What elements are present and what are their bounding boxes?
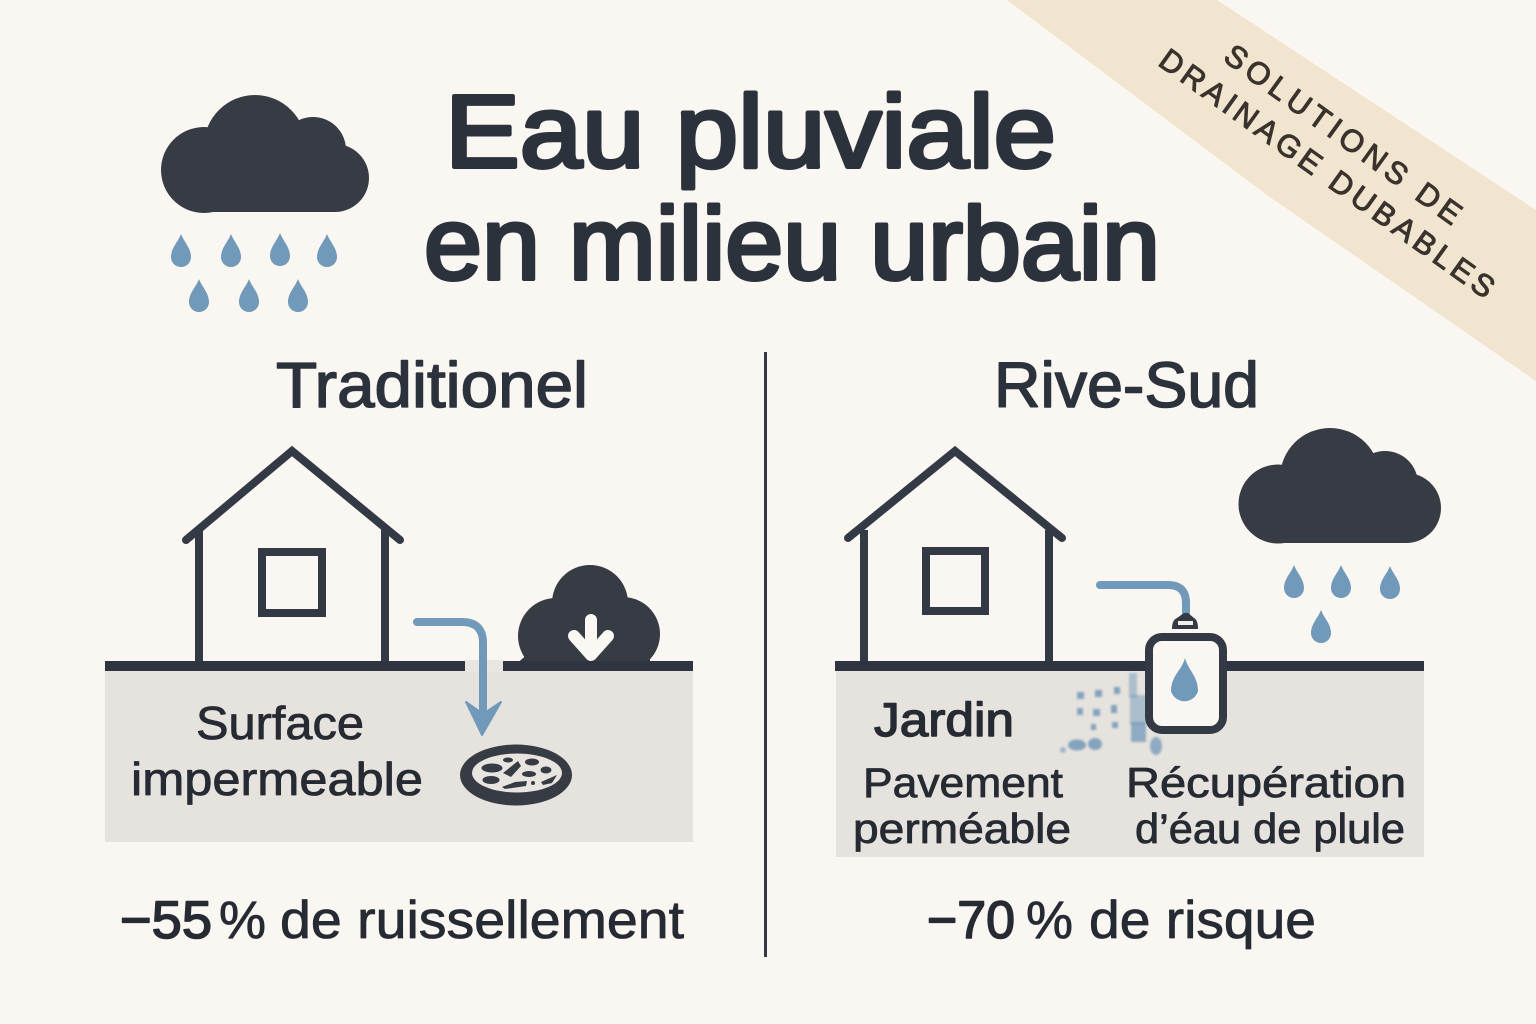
title bbox=[424, 74, 1160, 301]
ribbon banner: solutions de drainage durables: DRAINAGE DUBABLES bbox=[1153, 42, 1502, 305]
icon: downspout pipe bbox=[1100, 585, 1198, 629]
statistic: -70% risque: de risque bbox=[1089, 891, 1316, 950]
statistic: -55% ruissellement bbox=[120, 891, 684, 950]
label: pavement permeable: perméable bbox=[853, 805, 1071, 852]
label: surface impermeable bbox=[131, 697, 423, 805]
icon: house bbox=[848, 451, 1062, 662]
label: recuperation eau de pluie: d’éau de plule bbox=[1135, 805, 1405, 852]
statistic: -70% risque bbox=[927, 891, 1316, 950]
label: recuperation eau de pluie bbox=[1126, 759, 1406, 852]
statistic: -55% ruissellement: % bbox=[219, 891, 266, 950]
label: pavement permeable bbox=[853, 759, 1071, 852]
label: jardin: Jardin bbox=[874, 693, 1014, 746]
ribbon banner: solutions de drainage durables bbox=[1007, 0, 1536, 381]
panel: traditional scene bbox=[105, 451, 693, 842]
statistic: -55% ruissellement: de ruissellement bbox=[280, 891, 684, 950]
icon: water tank bbox=[1149, 637, 1223, 730]
gap in ground line bbox=[465, 660, 503, 672]
icon: rain cloud right bbox=[1238, 428, 1441, 643]
divider bbox=[764, 352, 767, 957]
label: pavement permeable: Pavement bbox=[863, 759, 1063, 806]
panel: Rive-Sud scene bbox=[835, 451, 1424, 857]
label: surface impermeable: Surface bbox=[196, 697, 364, 749]
arrow: runoff to drain bbox=[417, 622, 501, 735]
ground line bbox=[835, 661, 1424, 671]
statistic: -55% ruissellement: −55 bbox=[120, 891, 212, 950]
icon: rain cloud header bbox=[161, 95, 369, 312]
heading: Rive-Sud: Rive-Sud bbox=[994, 349, 1259, 421]
icon: house bbox=[186, 451, 400, 662]
label: surface impermeable: impermeable bbox=[131, 753, 423, 805]
heading: Traditionel: Traditionel bbox=[276, 349, 588, 421]
ribbon banner: solutions de drainage durables: SOLUTIONS DE bbox=[1218, 37, 1469, 232]
permeable pavement water stains bbox=[1060, 673, 1162, 755]
statistic: -70% risque: % bbox=[1026, 891, 1073, 950]
statistic: -70% risque: −70 bbox=[927, 891, 1015, 950]
title: en milieu urbain bbox=[424, 186, 1160, 301]
icon: storm drain bbox=[460, 744, 572, 806]
title: Eau pluviale bbox=[445, 74, 1056, 189]
ground panel: permeable surface bbox=[836, 671, 1424, 857]
label: recuperation eau de pluie: Récupération bbox=[1126, 759, 1406, 806]
icon: bush with down arrow bbox=[518, 565, 660, 661]
ground line bbox=[105, 661, 693, 671]
ground panel: impermeable surface bbox=[105, 671, 693, 842]
